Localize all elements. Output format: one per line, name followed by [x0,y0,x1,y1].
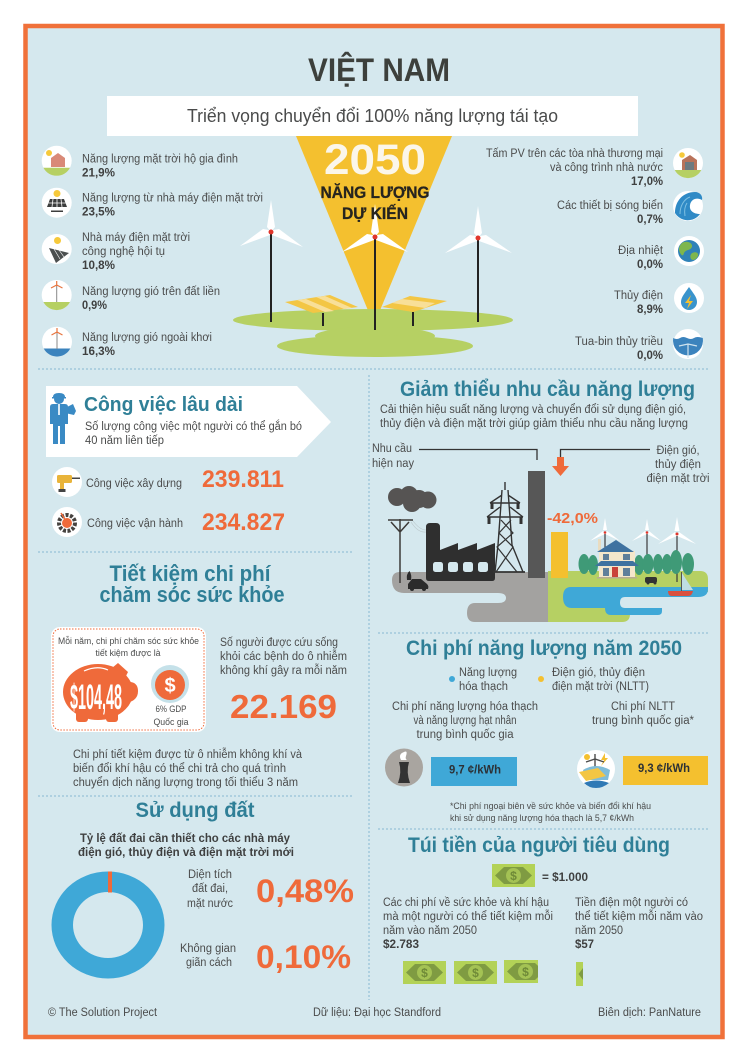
subtitle banner: Triển vọng chuyển đổi 100% năng lượng tái tạo [187,106,558,126]
stat: operation jobs: Công việc vận hành [87,518,183,530]
subheading [78,833,294,859]
stat: land area [187,869,354,910]
item: wave devices: 0,7% [637,214,663,226]
health savings text: năm vào năm 2050 [383,925,477,937]
item: offshore wind [42,327,212,358]
item: offshore wind: 16,3% [82,346,115,358]
health savings text: $2.783 [383,939,419,951]
item: onshore wind [42,280,220,312]
note: biến đổi khí hậu có thể chi trả cho quá trình [73,763,286,775]
funnel label: DỰ KIẾN [342,204,408,223]
footer: © The Solution Project [48,1007,158,1019]
illustration: green side [548,517,708,622]
lives saved [220,637,347,725]
heading: Chi phí năng lượng năm 2050 [406,637,682,660]
column: renewable: 9,3 ¢/kWh [638,763,690,775]
panel: reducing energy demand [372,378,710,622]
stat: spacing [180,939,351,975]
legend: Năng lượng [459,667,517,679]
small car [645,577,657,584]
sailboat [668,572,693,596]
icon: piggy bank [63,663,138,722]
item: hydro: 8,9% [637,304,663,316]
item: concentrated solar: công nghệ hội tụ [82,246,165,258]
funnel label [320,183,430,223]
stat: land area: mặt nước [187,898,233,910]
health savings text: mà một người có thể tiết kiệm mỗi [383,910,553,923]
item: offshore wind: Năng lượng gió ngoài khơi [82,332,212,344]
footnote: *Chi phí ngoại biên về sức khỏe và biến đổi khí hậu [450,801,651,812]
item: solar plant: Năng lượng từ nhà máy điện mặt trời [82,193,263,205]
stat: land area: Diện tích [188,869,232,881]
stat: construction jobs: 239.811 [202,466,284,493]
solar panel right [382,296,447,326]
item: hydro [614,283,704,316]
car [407,571,428,591]
footer: Biên dịch: PanNature [598,1007,701,1019]
note: chuyển dịch năng lượng trong tối thiểu 3 năm [73,777,298,789]
house [595,539,639,578]
label: renewables [560,445,710,485]
icon: GDP coin: $ [164,675,176,697]
footnote [450,801,651,824]
electricity savings text: $57 [575,939,594,951]
cloud [388,486,436,512]
item: commercial PV [486,148,703,188]
item: onshore wind: 0,9% [82,300,107,312]
item: tidal turbine: 0,0% [637,350,663,362]
savings card: Quốc gia [154,717,189,728]
icon: gear [52,507,82,537]
item: commercial PV: và công trình nhà nước [550,162,663,174]
icon: renewable mix [577,750,615,788]
item: geothermal [618,236,704,271]
pylon [487,482,525,572]
icon: cooling tower [385,748,423,786]
item: geothermal: Địa nhiệt [618,245,664,257]
legend [449,667,649,693]
legend bill [492,864,588,887]
item: onshore wind: Năng lượng gió trên đất liền [82,286,220,298]
legend: hóa thạch [459,681,508,693]
legend bill: = $1.000 [542,872,588,884]
panel: health savings [51,561,347,789]
lives saved: không khí gây ra mỗi năm [220,664,347,677]
reduction label: -42,0% [547,510,598,527]
heading: Tiết kiệm chi phí [110,561,271,586]
lives saved: Số người được cứu sống [220,637,338,649]
lives saved: 22.169 [230,688,337,725]
electricity savings text [575,897,703,951]
bills: health savings: $ [522,965,529,979]
heading: Túi tiền của người tiêu dùng [408,834,670,857]
item: geothermal: 0,0% [637,259,663,271]
subtitle banner [107,96,638,136]
footnote: khi sử dụng năng lượng hóa thạch là 5,7 ¢/kWh [450,813,634,824]
bill: electricity savings [576,962,583,986]
legend: điện mặt trời (NLTT) [552,681,649,693]
stat: spacing: 0,10% [256,939,351,975]
savings card [51,627,206,732]
ground [233,309,513,357]
electricity savings text: năm 2050 [575,925,623,937]
description: thủy điện và điện mặt trời giúp giảm thiểu nhu cầu năng lượng [380,418,688,430]
stat: spacing: giãn cách [186,957,232,969]
solar panel left [285,295,358,326]
heading [100,561,284,607]
item: commercial PV: Tấm PV trên các tòa nhà thương mại [486,148,663,160]
item: rooftop solar: 21,9% [82,168,115,180]
item: rooftop solar: Năng lượng mặt trời hộ gia đình [82,154,238,166]
icon: drill [52,467,82,497]
item: wave devices: Các thiết bị sóng biển [557,200,663,212]
column: renewable: Chi phí NLTT [611,701,675,713]
panel: consumer wallet [383,834,703,986]
panel: land use [52,799,354,978]
column: renewable [577,701,708,788]
power pole [388,519,413,583]
item: solar plant [42,188,263,219]
arrow [552,457,569,476]
icon: GDP coin [151,665,189,703]
arrow banner [46,386,331,457]
panel: long-term jobs [46,386,331,537]
left energy list [42,146,263,358]
icon: worker [50,393,76,444]
heading: chăm sóc sức khỏe [100,582,284,607]
item: solar plant: 23,5% [82,207,115,219]
item: hydro: Thủy điện [614,290,663,302]
donut chart [52,871,164,978]
label: renewables: Điện gió, [656,445,700,457]
turbine left [240,200,303,322]
hero: 2050 projection scene [233,136,513,357]
stat: construction jobs [86,466,284,493]
panel: energy cost 2050 [385,637,708,824]
note [73,748,303,789]
label: current demand: Nhu cầu [372,443,412,455]
lives saved: khỏi các bệnh do ô nhiễm [220,650,347,663]
bills: health savings [403,960,547,984]
stat: operation jobs [87,509,285,536]
column: fossil: và năng lượng hạt nhân [414,715,516,727]
description: Cải thiện hiệu suất năng lượng và chuyển đổi sử dụng điện gió, [380,404,686,416]
heading: Công việc lâu dài [84,394,243,416]
item: tidal turbine [575,329,703,362]
savings card: 6% GDP [156,704,186,715]
turbine right [445,206,512,322]
item: rooftop solar [42,146,238,180]
stat: spacing: Không gian [180,943,236,955]
item: wave devices [557,191,703,226]
subheading: điện gió, thủy điện và điện mặt trời mới [78,847,294,859]
health savings text [383,897,553,951]
legend bill: $ [510,869,517,883]
column: fossil: trung bình quốc gia [416,729,514,741]
label: renewables: điện mặt trời [646,473,710,485]
label: current demand [372,443,537,470]
turbine middle [342,204,408,330]
column: fossil: Chi phí năng lượng hóa thạch [392,701,538,713]
title: VIỆT NAM [308,52,450,88]
column: renewable: trung bình quốc gia* [592,715,695,727]
subheading: Tỷ lệ đất đai cần thiết cho các nhà máy [80,833,291,845]
funnel label: NĂNG LƯỢNG [320,183,430,202]
footer [48,1007,701,1019]
bar: reduced demand [551,532,568,578]
legend: Điện gió, thủy điện [552,667,645,679]
item: concentrated solar: Nhà máy điện mặt trời [82,232,190,244]
savings card: Mỗi năm, chi phí chăm sóc sức khỏe [58,636,199,647]
right energy list [486,148,704,362]
electricity savings text: Tiền điện một người có [575,897,688,909]
bar: current demand [528,471,545,578]
stat: land area: 0,48% [256,873,354,909]
note: Chi phí tiết kiệm được từ ô nhiễm không khí và [73,748,303,761]
column: fossil [385,701,538,786]
item: concentrated solar: 10,8% [82,260,115,272]
description [380,404,688,430]
icon: piggy bank: $104,48 [70,678,122,717]
turbine blades [590,517,696,544]
trees [578,550,694,575]
factory [426,523,495,581]
description [85,420,302,447]
stat: construction jobs: Công việc xây dựng [86,478,182,490]
description: Số lượng công việc một người có thể gắn bó [85,420,302,433]
description: 40 năm liên tiếp [85,435,164,447]
footer: Dữ liệu: Đại học Standford [313,1007,441,1019]
electricity savings text: thể tiết kiệm mỗi năm vào [575,910,703,923]
label: renewables: thủy điện [655,459,701,471]
illustration: grey city side [388,482,548,622]
stat: operation jobs: 234.827 [202,509,285,536]
bills: health savings: $ [472,966,479,980]
health savings text: Các chi phí về sức khỏe và khí hậu [383,897,549,909]
stat: land area: đất đai, [192,883,228,895]
item: commercial PV: 17,0% [631,176,663,188]
item: concentrated solar [42,232,190,272]
label: current demand: hiện nay [372,458,414,470]
heading: Sử dụng đất [136,799,254,822]
column: fossil: 9,7 ¢/kWh [449,764,501,776]
bills: health savings: $ [421,966,428,980]
savings card: tiết kiệm được là [96,648,161,659]
yellow funnel [296,136,452,325]
item: tidal turbine: Tua-bin thủy triều [575,336,663,348]
heading: Giảm thiểu nhu cầu năng lượng [400,378,695,401]
2050: 2050 [324,136,426,184]
